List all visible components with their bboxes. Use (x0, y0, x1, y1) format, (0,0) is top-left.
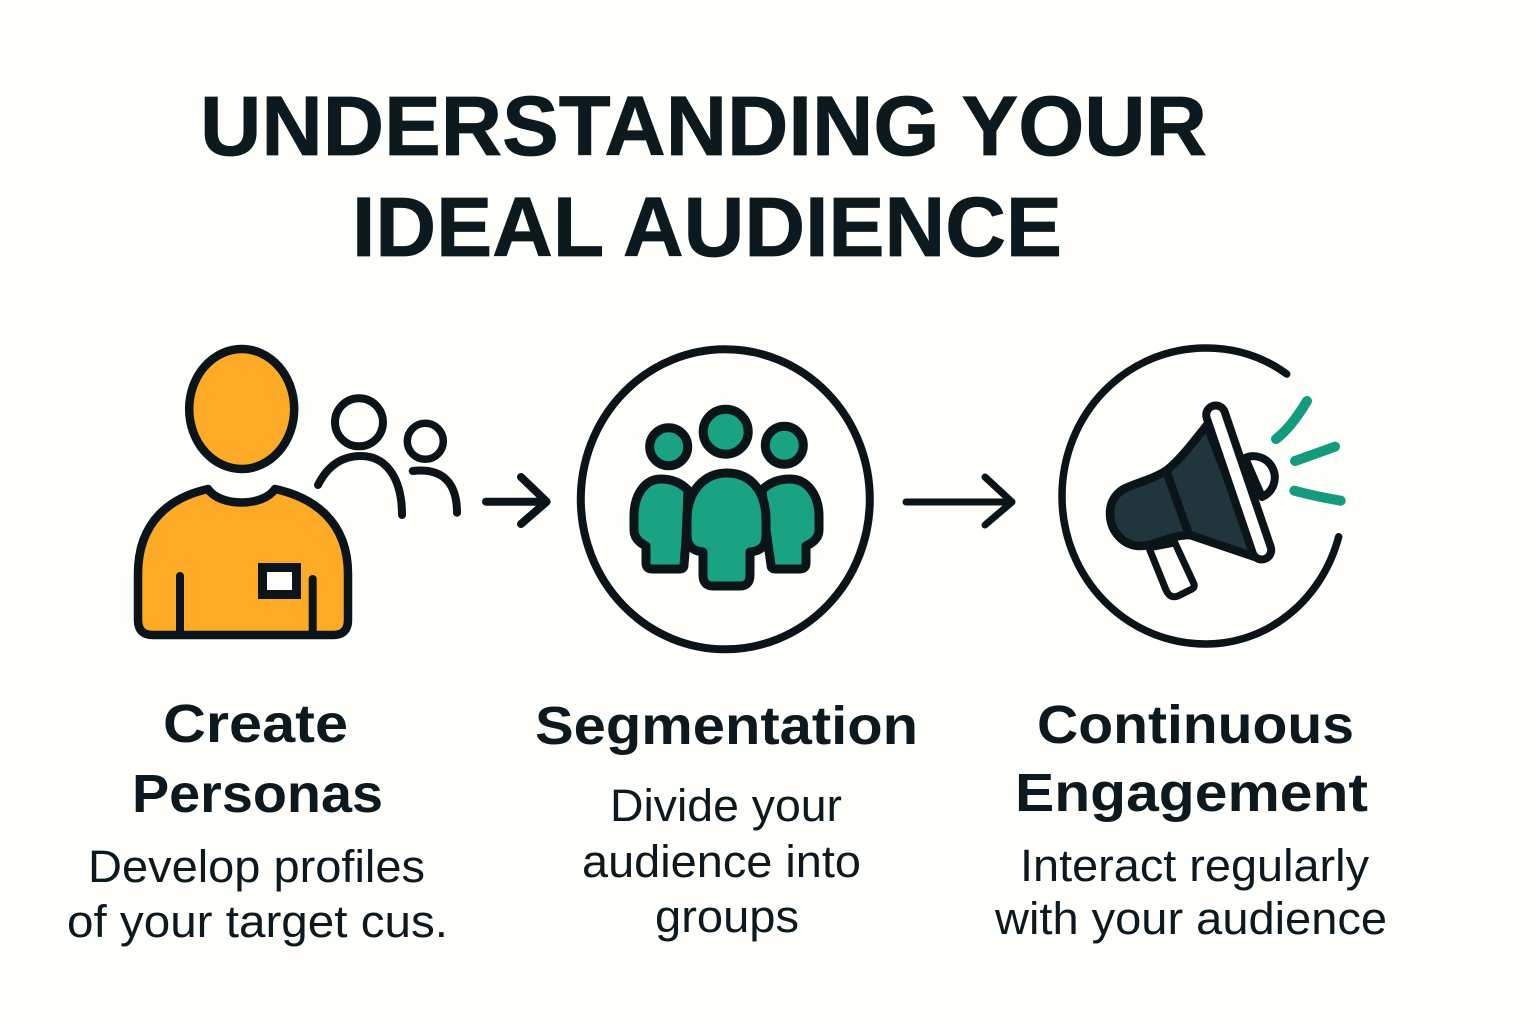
text: continuous engagement description: Interact regularly (1020, 840, 1370, 891)
arrow: personas to segmentation (486, 477, 547, 524)
heading: continuous engagement (1015, 695, 1368, 823)
arrow: segmentation to engagement (906, 477, 1012, 525)
panel: segmentation (535, 349, 1012, 942)
text: segmentation description (582, 780, 861, 942)
text: create personas description: Develop profiles (88, 841, 425, 892)
text: continuous engagement description (994, 840, 1387, 944)
panel: create personas (67, 349, 547, 947)
icon: megaphone in open circle (1062, 348, 1341, 644)
heading: create personas (132, 694, 383, 824)
title (200, 79, 1207, 274)
text: segmentation description: audience into (582, 836, 861, 887)
heading: create personas: Create (163, 694, 348, 754)
text: create personas description: of your target cus. (67, 896, 448, 947)
icon: circle with three green people (581, 349, 870, 649)
text: segmentation description: groups (655, 891, 799, 942)
heading: create personas: Personas (132, 764, 383, 824)
heading: continuous engagement: Engagement (1015, 763, 1368, 823)
heading: continuous engagement: Continuous (1037, 695, 1354, 755)
title: IDEAL AUDIENCE (352, 180, 1062, 274)
text: continuous engagement description: with your audience (994, 893, 1387, 944)
text: segmentation description: Divide your (610, 780, 842, 831)
heading: segmentation: Segmentation (535, 696, 918, 756)
icon: orange persona with two small outline people (138, 349, 457, 635)
panel: continuous engagement (994, 348, 1387, 944)
text: create personas description (67, 841, 448, 947)
title: UNDERSTANDING YOUR (200, 79, 1207, 173)
